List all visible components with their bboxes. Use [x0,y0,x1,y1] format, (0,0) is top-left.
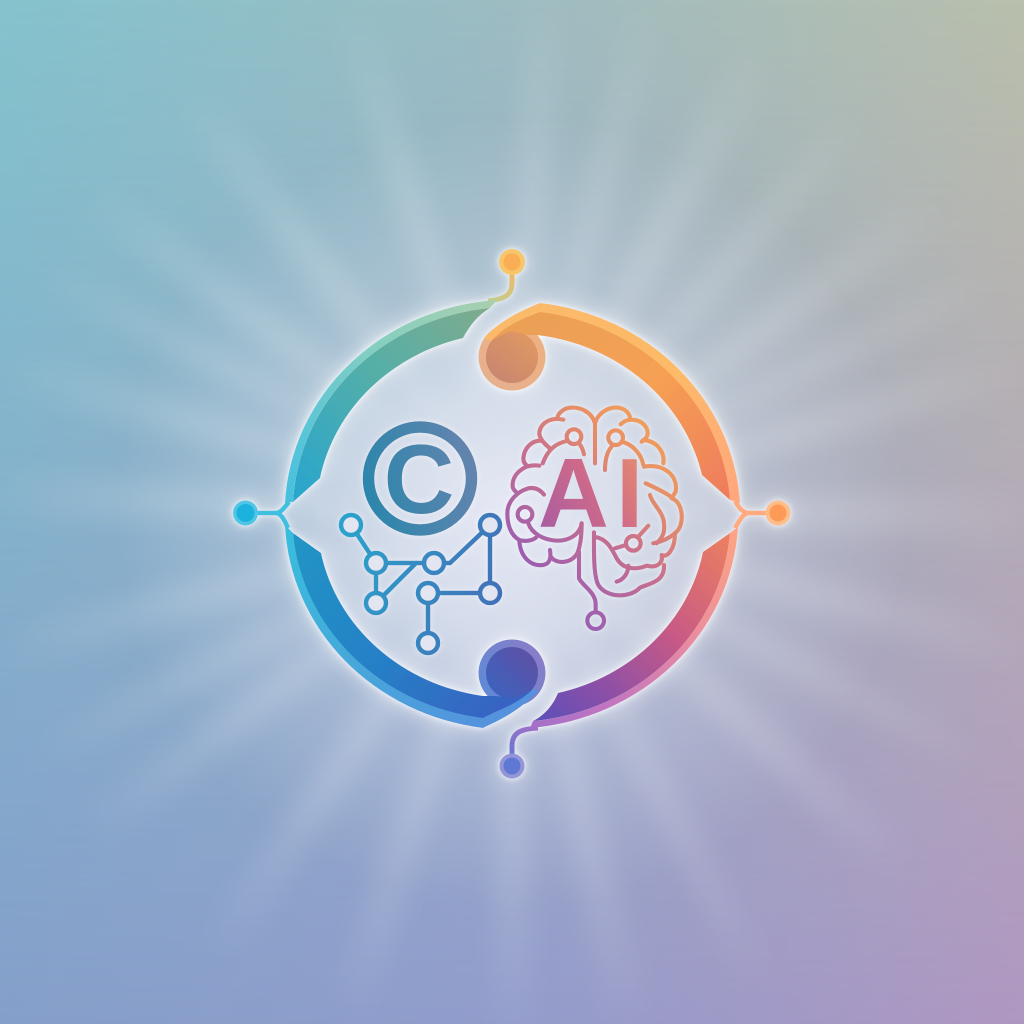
circuit network [341,515,500,653]
node: top [499,249,525,275]
node: bottom [500,754,524,778]
ring segment: top left teal [285,300,497,503]
AI lettering: AI [538,438,643,548]
node: right [766,500,790,526]
connector fork: right node [735,501,778,528]
brain outline with circuit nodes [507,408,682,629]
connector stem: top node [488,262,512,301]
connector stem: bottom node [512,728,538,766]
central glow [112,113,912,913]
ring segment: bottom left blue with swirl [285,525,546,728]
copyright symbol: C [384,424,454,534]
node: left [233,500,258,526]
copyright symbol [368,424,472,534]
connector fork: left node [245,502,289,528]
circular ring emblem [233,249,790,778]
network links [351,525,490,643]
ring segment: top right orange with swirl [478,303,740,503]
ring segment: bottom right pink and purple [530,527,738,728]
network nodes [341,515,500,653]
